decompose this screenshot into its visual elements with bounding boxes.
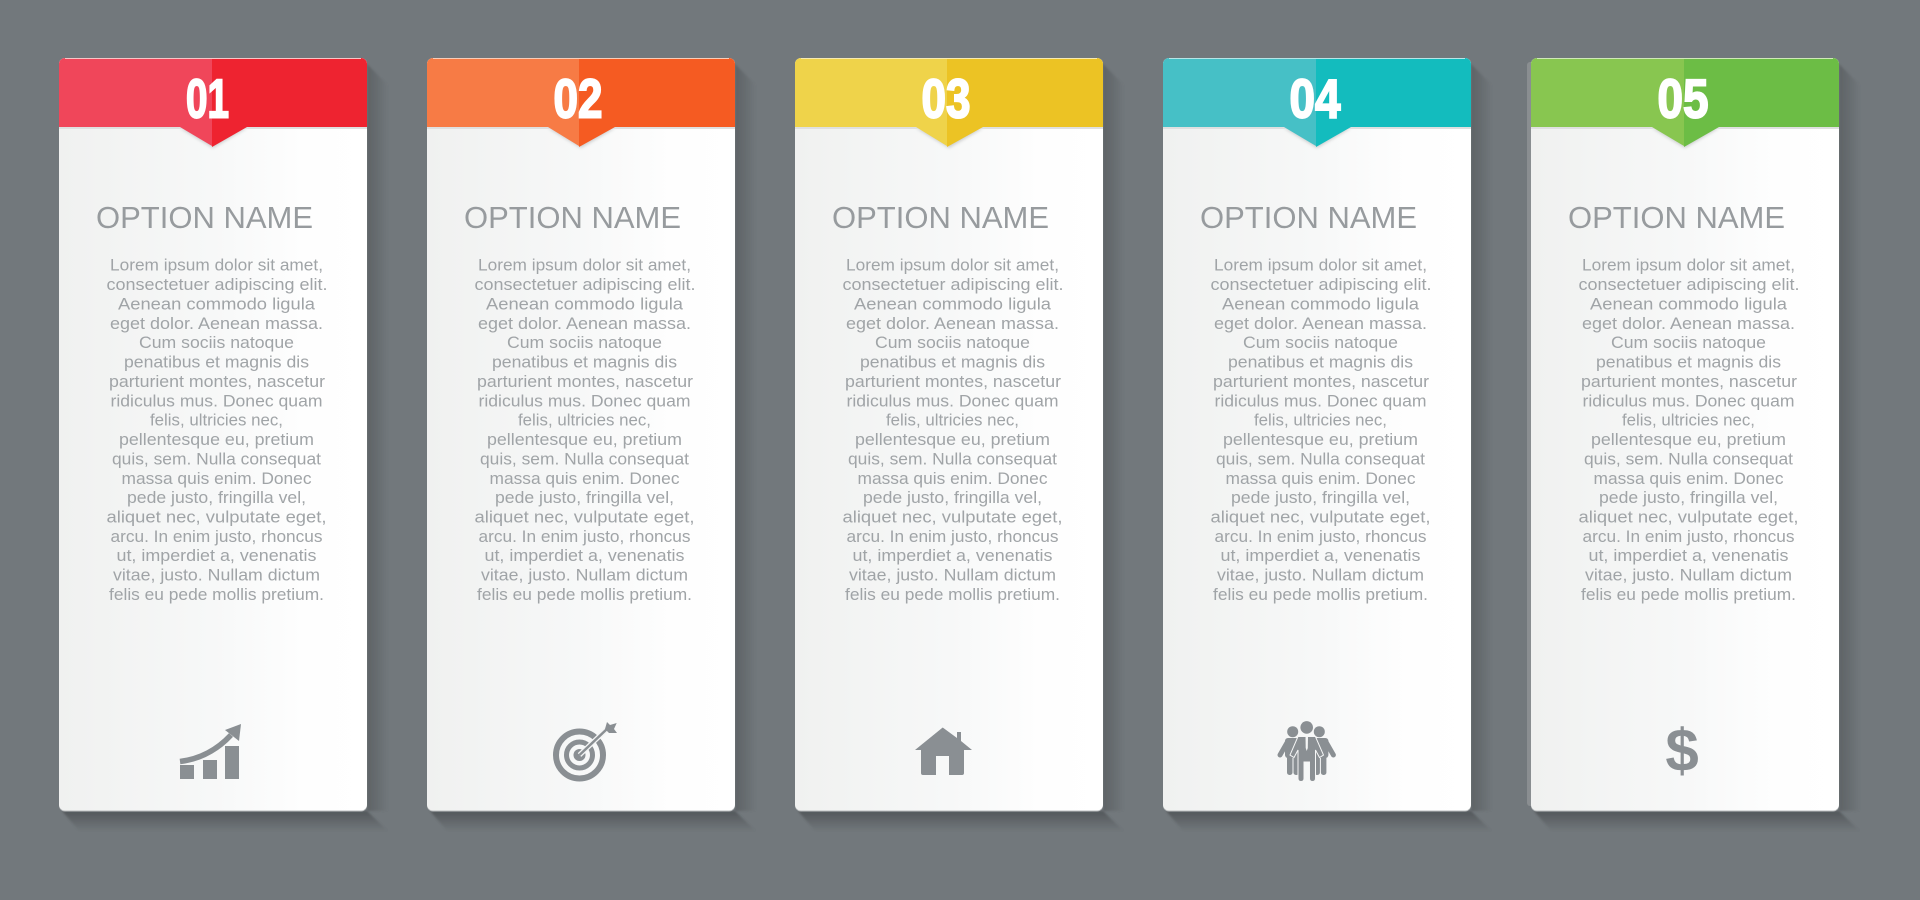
- body text: parturient montes, nascetur: [1213, 372, 1429, 391]
- number 03: 03: [922, 68, 970, 130]
- body text: aliquet nec, vulputate eget,: [474, 508, 694, 526]
- body text: Cum sociis natoque: [1243, 333, 1398, 352]
- body text: consectetuer adipiscing elit.: [842, 275, 1064, 294]
- body text: Aenean commodo ligula: [1590, 294, 1788, 313]
- number 05: 05: [1658, 68, 1708, 130]
- body text: pellentesque eu, pretium: [487, 430, 682, 449]
- body text: parturient montes, nascetur: [1581, 372, 1797, 391]
- body text: ut, imperdiet a, venenatis: [1588, 546, 1788, 565]
- body text: ridiculus mus. Donec quam: [1214, 391, 1426, 410]
- heading: option name: OPTION NAME: [832, 200, 1049, 235]
- body text: penatibus et magnis dis: [860, 352, 1045, 372]
- body text: massa quis enim. Donec: [858, 469, 1048, 488]
- icon: target with arrow: [556, 722, 617, 778]
- header band 01: [59, 58, 367, 147]
- body text: quis, sem. Nulla consequat: [1216, 449, 1425, 468]
- icon: dollar sign: $: [1665, 717, 1699, 784]
- body text: arcu. In enim justo, rhoncus: [1582, 527, 1794, 546]
- body text: arcu. In enim justo, rhoncus: [478, 527, 690, 546]
- body text: arcu. In enim justo, rhoncus: [110, 527, 322, 546]
- heading: option name: OPTION NAME: [464, 200, 681, 235]
- body text: vitae, justo. Nullam dictum: [1585, 566, 1792, 585]
- body text: pede justo, fringilla vel,: [495, 488, 674, 507]
- body text: Aenean commodo ligula: [118, 294, 316, 313]
- body text: vitae, justo. Nullam dictum: [481, 566, 688, 585]
- body text: Lorem ipsum dolor sit amet,: [1582, 256, 1795, 275]
- body text: consectetuer adipiscing elit.: [1578, 275, 1800, 294]
- body text: felis, ultricies nec,: [1622, 411, 1755, 430]
- body text: pede justo, fringilla vel,: [1231, 488, 1410, 507]
- body text: pede justo, fringilla vel,: [1599, 488, 1778, 507]
- body text: ridiculus mus. Donec quam: [110, 391, 322, 410]
- body text: felis, ultricies nec,: [1254, 411, 1387, 430]
- body text: eget dolor. Aenean massa.: [478, 314, 691, 333]
- body text: pellentesque eu, pretium: [1223, 430, 1418, 449]
- body text: eget dolor. Aenean massa.: [1214, 314, 1427, 333]
- body text: consectetuer adipiscing elit.: [106, 275, 328, 294]
- header band 04: [1163, 58, 1471, 147]
- body text: [474, 256, 696, 604]
- body text: Cum sociis natoque: [507, 333, 662, 352]
- body text: parturient montes, nascetur: [109, 372, 325, 391]
- body text: arcu. In enim justo, rhoncus: [846, 527, 1058, 546]
- icon: house: [915, 728, 972, 775]
- body text: felis eu pede mollis pretium.: [845, 585, 1060, 604]
- body text: massa quis enim. Donec: [1226, 469, 1416, 488]
- body text: felis eu pede mollis pretium.: [1213, 585, 1428, 604]
- body text: Lorem ipsum dolor sit amet,: [1214, 256, 1427, 275]
- body text: [106, 256, 328, 604]
- header band 03: [795, 58, 1103, 147]
- body text: felis eu pede mollis pretium.: [109, 585, 324, 604]
- body text: ridiculus mus. Donec quam: [478, 391, 690, 410]
- body text: quis, sem. Nulla consequat: [112, 449, 321, 468]
- body text: Lorem ipsum dolor sit amet,: [110, 256, 323, 275]
- body text: vitae, justo. Nullam dictum: [113, 566, 320, 585]
- header band 02: [427, 58, 735, 147]
- body text: pellentesque eu, pretium: [119, 430, 314, 449]
- body text: [842, 256, 1064, 604]
- body text: penatibus et magnis dis: [1596, 352, 1781, 372]
- body text: ridiculus mus. Donec quam: [846, 391, 1058, 410]
- body text: Cum sociis natoque: [139, 333, 294, 352]
- body text: vitae, justo. Nullam dictum: [1217, 566, 1424, 585]
- icon: growth chart: [180, 724, 241, 779]
- body text: vitae, justo. Nullam dictum: [849, 566, 1056, 585]
- body text: ut, imperdiet a, venenatis: [1220, 546, 1420, 565]
- body text: penatibus et magnis dis: [492, 352, 677, 372]
- body text: Cum sociis natoque: [875, 333, 1030, 352]
- body text: felis eu pede mollis pretium.: [477, 585, 692, 604]
- panel: card 01: [59, 58, 389, 832]
- body text: ridiculus mus. Donec quam: [1582, 391, 1794, 410]
- body text: Aenean commodo ligula: [486, 294, 684, 313]
- body text: eget dolor. Aenean massa.: [846, 314, 1059, 333]
- body text: pede justo, fringilla vel,: [863, 488, 1042, 507]
- body text: aliquet nec, vulputate eget,: [106, 508, 326, 526]
- body text: felis eu pede mollis pretium.: [1581, 585, 1796, 604]
- body text: parturient montes, nascetur: [845, 372, 1061, 391]
- body text: consectetuer adipiscing elit.: [474, 275, 696, 294]
- body text: aliquet nec, vulputate eget,: [1210, 508, 1430, 526]
- body text: massa quis enim. Donec: [122, 469, 312, 488]
- number 01: 01: [186, 68, 229, 130]
- body text: massa quis enim. Donec: [490, 469, 680, 488]
- body text: Lorem ipsum dolor sit amet,: [846, 256, 1059, 275]
- body text: ut, imperdiet a, venenatis: [484, 546, 684, 565]
- body text: [1578, 256, 1800, 604]
- body text: felis, ultricies nec,: [150, 411, 283, 430]
- body text: arcu. In enim justo, rhoncus: [1214, 527, 1426, 546]
- icon: group of people: [1280, 721, 1333, 782]
- header band 05: [1531, 58, 1839, 147]
- body text: ut, imperdiet a, venenatis: [852, 546, 1052, 565]
- body text: quis, sem. Nulla consequat: [480, 449, 689, 468]
- body text: aliquet nec, vulputate eget,: [842, 508, 1062, 526]
- body text: pede justo, fringilla vel,: [127, 488, 306, 507]
- body text: Aenean commodo ligula: [854, 294, 1052, 313]
- body text: Cum sociis natoque: [1611, 333, 1766, 352]
- heading: option name: OPTION NAME: [96, 200, 313, 235]
- body text: penatibus et magnis dis: [124, 352, 309, 372]
- body text: [1210, 256, 1432, 604]
- body text: pellentesque eu, pretium: [855, 430, 1050, 449]
- body text: consectetuer adipiscing elit.: [1210, 275, 1432, 294]
- body text: ut, imperdiet a, venenatis: [116, 546, 316, 565]
- body text: aliquet nec, vulputate eget,: [1578, 508, 1798, 526]
- body text: Aenean commodo ligula: [1222, 294, 1420, 313]
- body text: quis, sem. Nulla consequat: [848, 449, 1057, 468]
- body text: felis, ultricies nec,: [518, 411, 651, 430]
- number 02: 02: [554, 68, 602, 130]
- body text: felis, ultricies nec,: [886, 411, 1019, 430]
- panel: card 05: [1527, 58, 1861, 832]
- heading: option name: OPTION NAME: [1568, 200, 1785, 235]
- body text: massa quis enim. Donec: [1594, 469, 1784, 488]
- body text: quis, sem. Nulla consequat: [1584, 449, 1793, 468]
- panel: card 02: [427, 58, 757, 832]
- panel: card 04: [1163, 58, 1493, 832]
- body text: penatibus et magnis dis: [1228, 352, 1413, 372]
- body text: eget dolor. Aenean massa.: [110, 314, 323, 333]
- body text: eget dolor. Aenean massa.: [1582, 314, 1795, 333]
- body text: pellentesque eu, pretium: [1591, 430, 1786, 449]
- panel: card 03: [795, 58, 1125, 832]
- heading: option name: OPTION NAME: [1200, 200, 1417, 235]
- number 04: 04: [1290, 68, 1341, 130]
- body text: Lorem ipsum dolor sit amet,: [478, 256, 691, 275]
- body text: parturient montes, nascetur: [477, 372, 693, 391]
